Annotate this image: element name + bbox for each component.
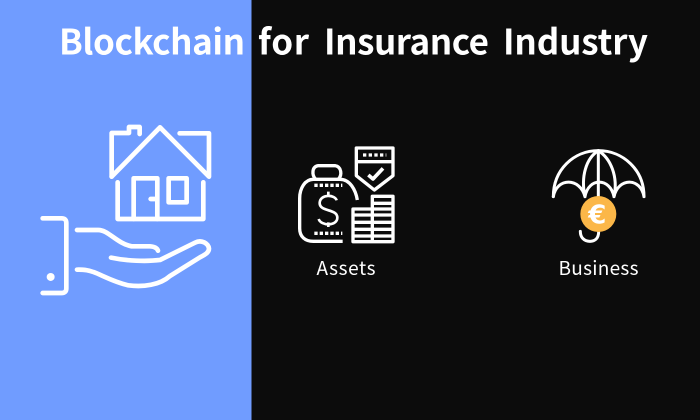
icon: umbrella with euro coin: [553, 151, 644, 241]
icon: hand holding house: [43, 127, 209, 293]
title: [59, 14, 648, 66]
label: Business: Business: [558, 254, 639, 281]
umbrella canopy: [553, 151, 644, 241]
title: Insurance: [324, 14, 489, 66]
icon: umbrella with euro coin: €: [587, 200, 606, 230]
label: Assets: Assets: [316, 254, 376, 281]
icon: money bag, shield and coins: [300, 148, 393, 242]
euro coin: [580, 196, 616, 232]
title: Blockchain: [59, 14, 245, 66]
title: Industry: [503, 14, 648, 66]
title: for: [258, 14, 310, 66]
panel: blue left background: [0, 0, 252, 420]
